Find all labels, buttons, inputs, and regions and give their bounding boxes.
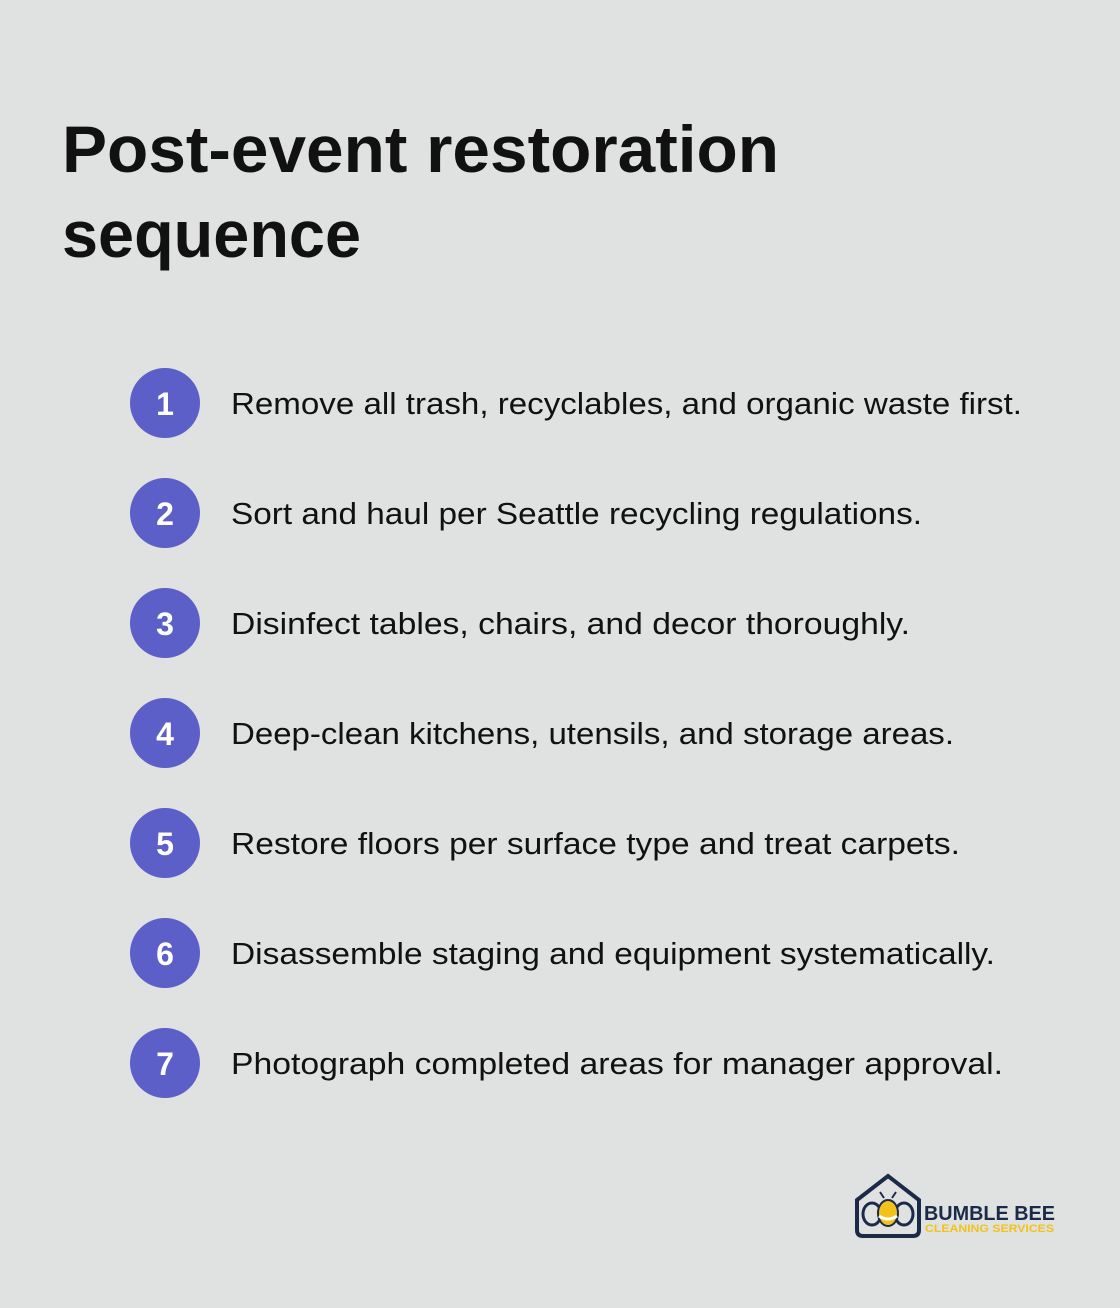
step 5: 5 <box>156 826 174 862</box>
step 7 <box>130 1028 1003 1098</box>
step 1: 1 <box>156 386 174 422</box>
step 3: Disinfect tables, chairs, and decor thoroughly. <box>231 606 910 641</box>
title: sequence <box>62 197 361 271</box>
step 4: Deep-clean kitchens, utensils, and storage areas. <box>231 716 954 751</box>
step 7: Photograph completed areas for manager approval. <box>231 1046 1003 1081</box>
logo text: BUMBLE BEE <box>924 1203 1055 1225</box>
step 4: 4 <box>156 716 174 752</box>
step 5 <box>130 808 960 878</box>
step 2: Sort and haul per Seattle recycling regulations. <box>231 496 922 531</box>
step 1 <box>130 368 1022 438</box>
title: Post-event restoration <box>62 112 779 186</box>
title <box>62 112 779 271</box>
step 7: 7 <box>156 1046 174 1082</box>
step 6: Disassemble staging and equipment systematically. <box>231 936 995 971</box>
step 1: Remove all trash, recyclables, and organic waste first. <box>231 386 1022 421</box>
step 3 <box>130 588 910 658</box>
logo <box>857 1176 1055 1236</box>
step 5: Restore floors per surface type and treat carpets. <box>231 826 960 861</box>
step 6 <box>130 918 995 988</box>
icon: bee house <box>857 1176 919 1236</box>
logo: CLEANING SERVICES <box>925 1223 1054 1235</box>
step 2: 2 <box>156 496 174 532</box>
step 2 <box>130 478 922 548</box>
step 6: 6 <box>156 936 174 972</box>
step list <box>130 368 1022 1098</box>
step 3: 3 <box>156 606 174 642</box>
step 4 <box>130 698 954 768</box>
